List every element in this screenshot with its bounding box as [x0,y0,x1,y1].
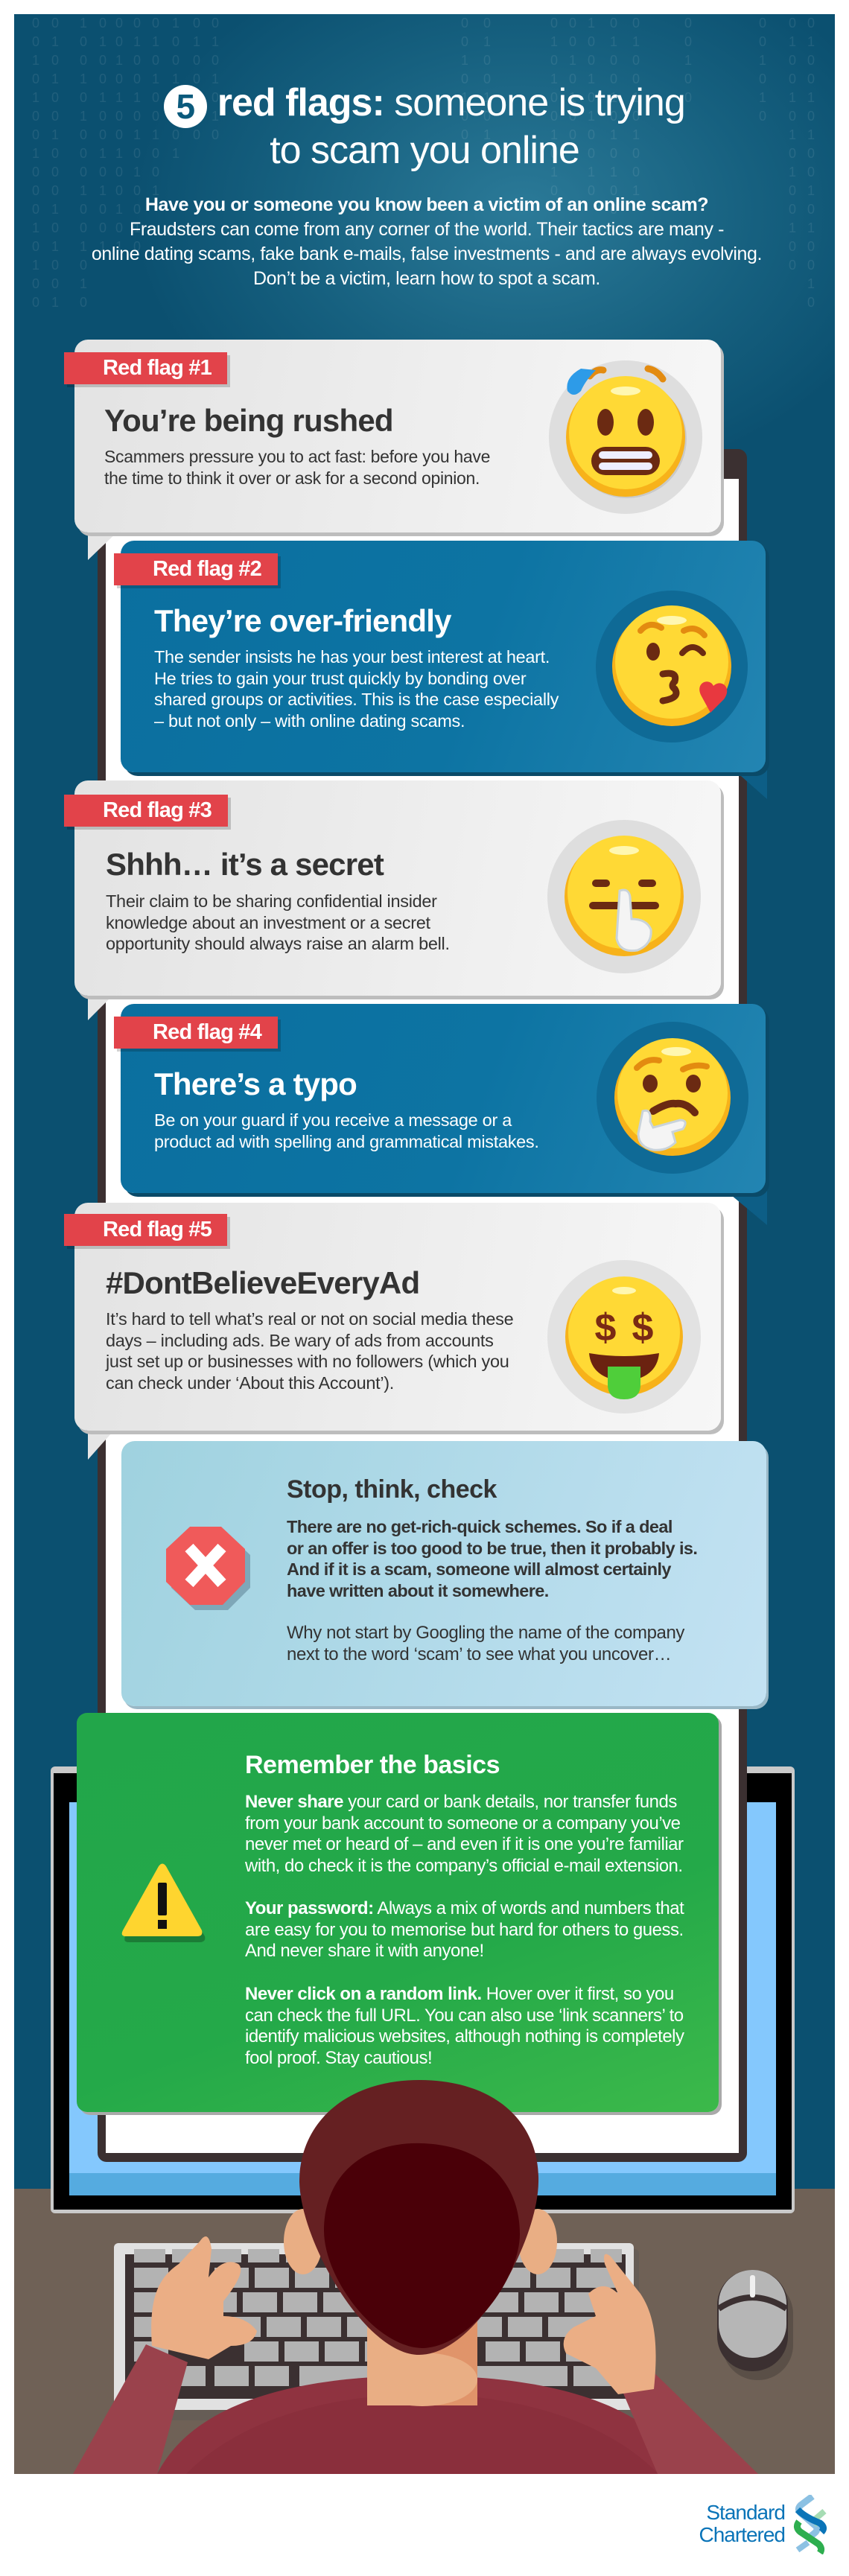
text: rushed: Scammers pressure you to act fast: before you have [104,447,490,466]
intro text: online dating scams, fake bank e-mails, false investments - and are always evolving. [92,244,762,264]
background panel: 00100 [684,16,692,105]
text: password: are easy for you to memorise but hard for others to guess. [245,1920,684,1939]
text: over-friendly: – but not only – with online dating scams. [154,710,465,730]
text: secret [106,891,450,953]
label: red flag 2: Red flag #2 [153,557,261,581]
background panel: 10010101 [172,16,179,161]
icon: sweating emoji [549,360,702,514]
background panel: 0101001001 [152,16,159,198]
heading: secret: Shhh… it’s a secret [106,847,384,882]
text: secret: Their claim to be sharing confidential insider [106,891,437,911]
text: rushed [104,447,490,488]
text: password: And never share it with anyone! [245,1941,484,1961]
heading: typo: There’s a typo [154,1066,357,1101]
background panel: 00101001 [461,16,468,161]
label: red flag 2 [114,553,278,585]
icon: shushing emoji [547,820,701,973]
text: stop think check [287,1517,697,1600]
label: red flag 3: Red flag #3 [103,798,212,822]
text: stop think check: have written about it somewhere. [287,1580,549,1600]
logo: Standard Chartered [699,2495,827,2554]
background panel: 0100100101001 [99,16,106,254]
text: ads: It’s hard to tell what’s real or not on social media these [106,1309,513,1329]
text: stop think check: And if it is a scam, someone will almost certainly [287,1559,671,1579]
logo text [699,2501,785,2546]
label: red flag 1: Red flag #1 [103,356,212,380]
background panel: 0010100100101 [115,16,123,254]
heading: rushed: You’re being rushed [104,403,393,438]
text: googling tip: next to the word ‘scam’ to see what you uncover… [287,1644,671,1664]
panel: stop think check [121,1441,766,1706]
background panel: 1001010010 [588,16,595,198]
illustration: person at keyboard [73,2080,793,2474]
text: over-friendly: The sender insists he has your best interest at heart. [154,647,550,667]
logo text: Standard [706,2501,785,2524]
text: secret: opportunity should always raise an alarm bell. [106,934,450,953]
intro text [92,194,762,289]
text: random link: Never click on a random link. Hover over it first, so you [245,1984,674,2004]
text: googling tip: Why not start by Googling the name of the company [287,1623,684,1643]
text: ads: days – including ads. Be wary of ads from accounts [106,1330,494,1349]
text: password: Your password: Always a mix of words and numbers that [245,1898,684,1918]
intro text: Have you or someone you know been a victim of an online scam? [145,194,708,215]
text: ads: can check under ‘About this Account’). [106,1373,394,1393]
background panel: 0100100 [193,16,200,142]
intro text: Fraudsters can come from any corner of the world. Their tactics are many - [130,219,724,240]
text: never share [245,1792,684,1875]
text: over-friendly [154,647,559,731]
label: red flag 5 [64,1214,227,1246]
background panel: 0100101001010010 [807,16,815,310]
text: never share: from your bank account to someone or a company you’ve [245,1813,681,1834]
text: never share: with, do check it is the company’s official e-mail extension. [245,1856,683,1875]
icon: thinking emoji [597,1022,748,1174]
panel: red flag 2 [114,541,767,799]
background panel: 01001010100100 [789,16,796,273]
heading: over-friendly: They’re over-friendly [154,603,451,638]
background panel: 0100101001 [632,16,640,198]
label: red flag 4 [114,1017,278,1049]
panel: red flag 1 [64,340,724,560]
text: random link: identify malicious websites, although nothing is completely [245,2026,684,2047]
text: typo: product ad with spelling and grammatical mistakes. [154,1132,539,1151]
label: red flag 1 [64,352,227,384]
title [164,81,685,172]
background panel: 1001010001001010 [80,16,87,310]
background panel: 0010100100010100 [32,16,39,310]
background panel: 01001010100 [610,16,617,217]
panel: red flag 4 [114,1004,767,1225]
text: never share: never met or heard of – and even if it is one you’re familiar [245,1834,683,1854]
text: stop think check: or an offer is too good to be true, then it probably is. [287,1539,697,1558]
person [73,2080,758,2474]
heading: stop think check: Stop, think, check [287,1475,497,1504]
text: rushed: the time to think it over or ask for a second opinion. [104,468,480,487]
text: never share: Never share your card or bank details, nor transfer funds [245,1792,677,1812]
text: over-friendly: He tries to gain your trust quickly by bonding over [154,669,526,688]
phone frame [98,449,747,2162]
heading: remember the basics: Remember the basics [245,1751,500,1779]
logo symbol [794,2495,827,2554]
text: secret: knowledge about an investment or a secret [106,913,430,932]
background panel: 0101001000101001 [51,16,59,310]
panel: red flag 3 [64,780,724,1020]
background panel: 0100101010010 [133,16,141,254]
heading: dont believe every ad: #DontBelieveEveryAd [106,1265,419,1300]
text: random link [245,1984,684,2067]
icon: kissing emoji [596,591,748,742]
background panel: 0101001010 [550,16,558,198]
text: googling tip [287,1623,685,1664]
background panel: 0010100 [569,16,576,142]
background panel: 001010 [759,16,766,124]
text: typo [154,1110,539,1151]
intro text: Don’t be a victim, learn how to spot a scam. [253,268,600,289]
text: typo: Be on your guard if you receive a message or a [154,1110,512,1130]
title: to scam you online [270,129,579,172]
icon: money-mouth emoji: $ [632,1306,654,1349]
background panel: 0100101 [483,16,491,142]
text: ads: just set up or businesses with no followers (which you [106,1352,509,1371]
logo text: Chartered [699,2523,785,2546]
title: red flags: someone is trying [217,81,685,124]
mouse [717,2270,793,2380]
text: random link: can check the full URL. You can also use ‘link scanners’ to [245,2005,684,2026]
title: 5 [176,87,195,126]
icon: warning triangle [122,1863,206,1942]
text: stop think check: There are no get-rich-quick schemes. So if a deal [287,1517,672,1536]
label: red flag 3 [64,795,228,827]
text: password [245,1898,684,1961]
panel: remember the basics [77,1713,719,2112]
label: red flag 4: Red flag #4 [153,1020,261,1044]
text: ads [105,1309,513,1393]
panel: red flag 5 [64,1203,724,1460]
background panel: 0101010 [212,16,219,142]
text: random link: fool proof. Stay cautious! [245,2048,432,2067]
icon: stop octagon [166,1527,250,1610]
text: over-friendly: shared groups or activities. This is the case especially [154,690,559,709]
label: red flag 5: Red flag #5 [103,1218,212,1241]
keyboard [114,2243,639,2420]
icon: money-mouth emoji [547,1260,701,1413]
icon: money-mouth emoji: $ [595,1306,617,1349]
